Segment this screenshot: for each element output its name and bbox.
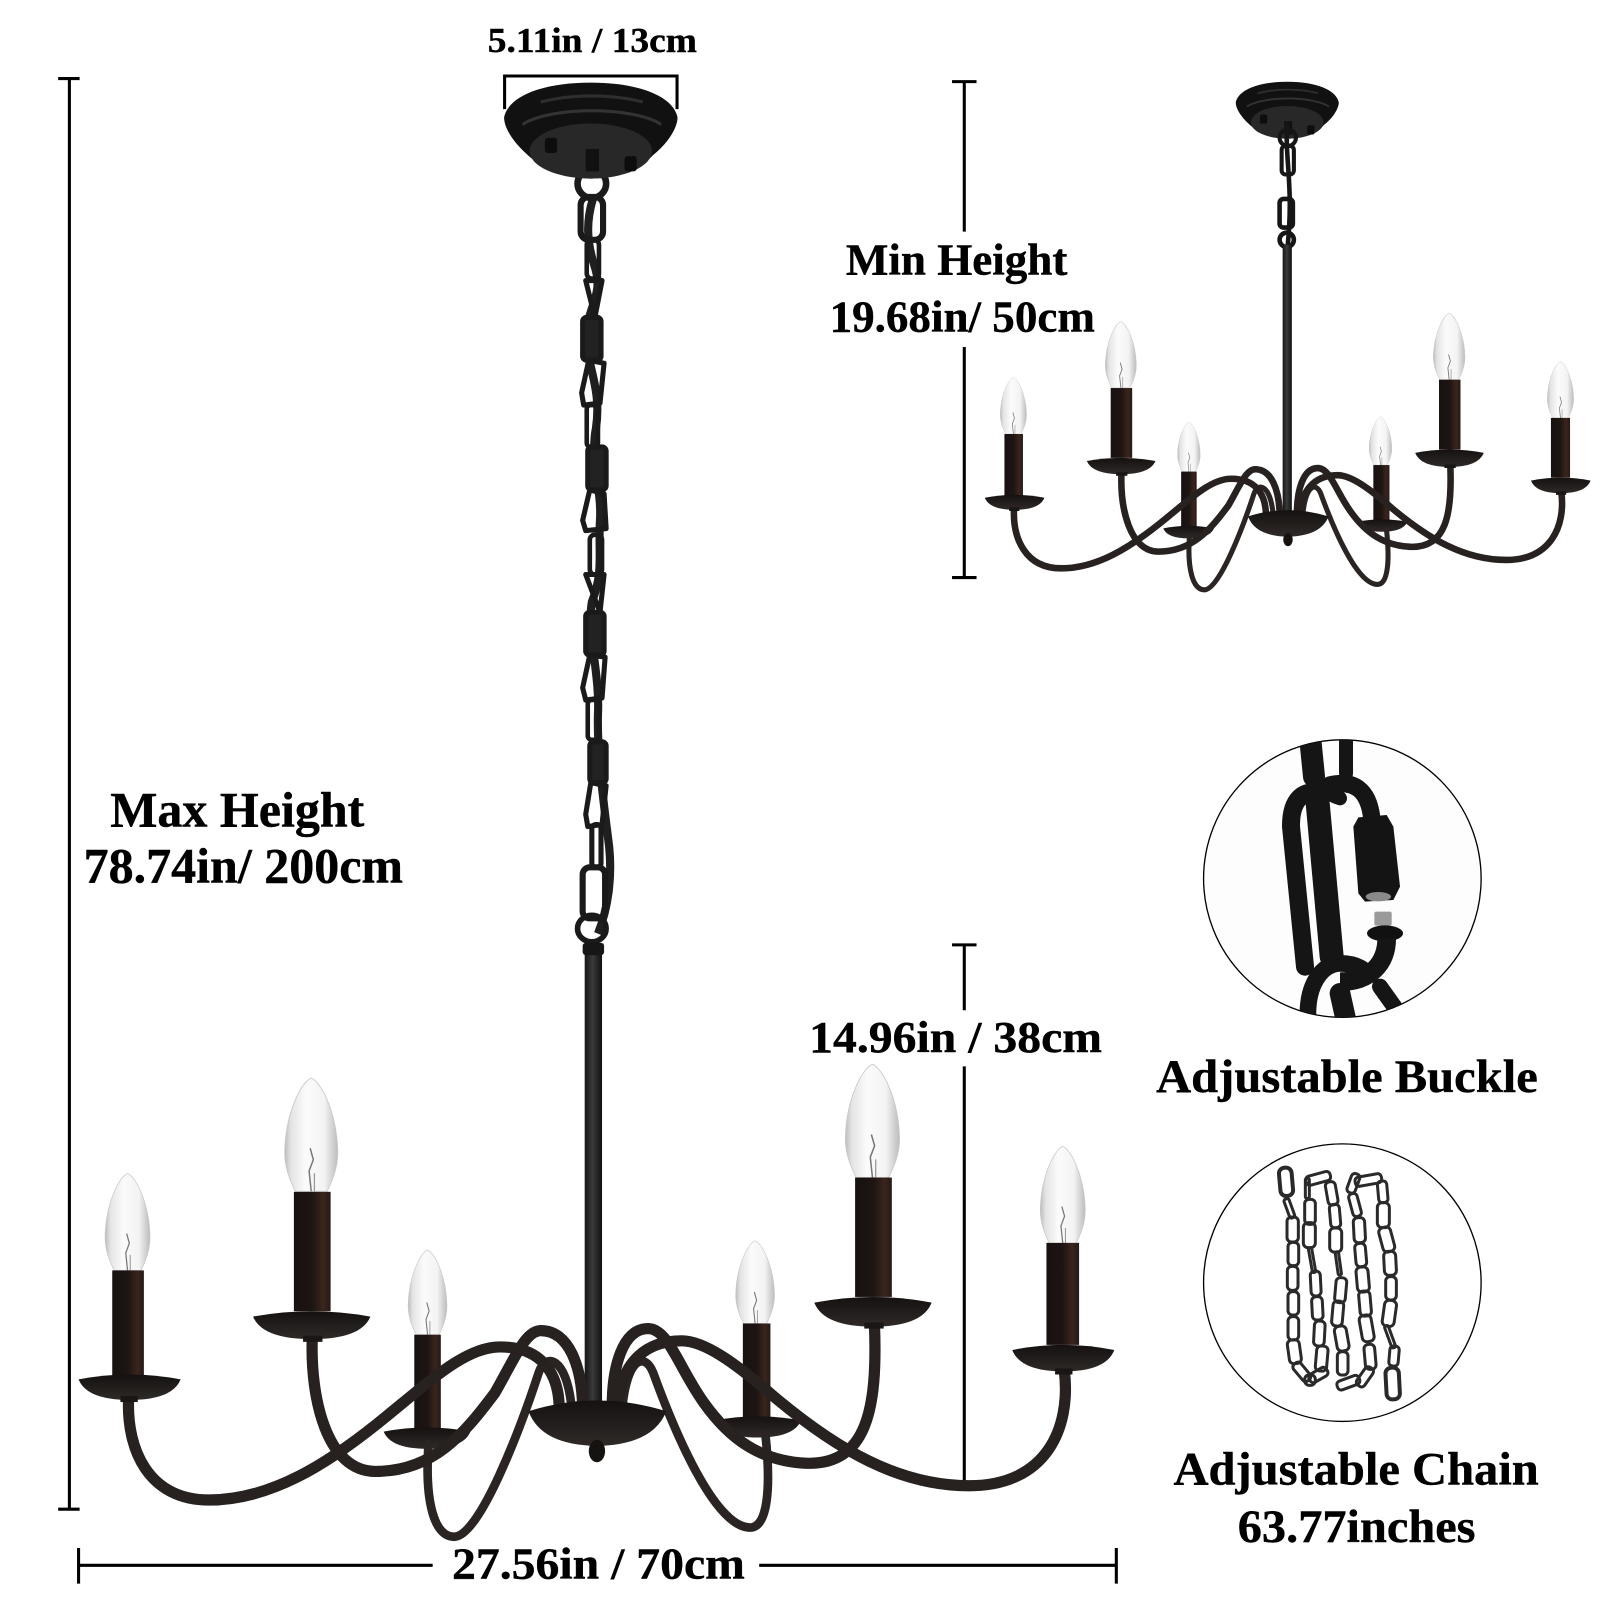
front arms	[128, 1326, 1065, 1500]
small chandelier rod	[1283, 245, 1292, 511]
back candles	[384, 1241, 801, 1449]
dimension: fixture height line	[952, 945, 977, 1488]
small chandelier canopy	[1236, 82, 1339, 139]
front candles	[79, 1064, 1114, 1402]
label: fixture height: 14.96in / 38cm	[809, 1012, 1102, 1062]
label: adjustable buckle: Adjustable Buckle	[1156, 1051, 1538, 1103]
large chandelier chain	[578, 149, 610, 942]
large chandelier body with arms, candles and bulbs	[79, 1064, 1114, 1537]
label: max height: 78.74in/ 200cm	[84, 838, 403, 894]
icon: coiled chain	[1278, 1167, 1400, 1400]
panel: buckle detail circle	[1204, 737, 1481, 1023]
large chandelier canopy	[504, 83, 678, 179]
label: max height: Max Height	[110, 782, 365, 838]
large chandelier rod	[583, 943, 604, 1403]
label: min height: 19.68in/ 50cm	[830, 292, 1095, 342]
small chandelier chain	[1280, 122, 1296, 247]
canopy stud	[586, 149, 600, 173]
dimension: fixture width line	[79, 1548, 1116, 1584]
label: adjustable chain: 63.77inches	[1238, 1501, 1476, 1553]
panel: chain detail circle	[1204, 1144, 1481, 1421]
central bowl and finial	[529, 1401, 666, 1462]
label: max height	[84, 782, 403, 894]
back arms	[428, 1361, 768, 1537]
dimension: min height line	[952, 82, 977, 578]
label: min height: Min Height	[846, 234, 1067, 284]
icon: buckle photo	[1291, 737, 1403, 1023]
label: adjustable chain: Adjustable Chain	[1173, 1444, 1539, 1496]
label: fixture width: 27.56in / 70cm	[452, 1539, 745, 1589]
dimension: canopy width bracket	[505, 76, 677, 109]
label: min height	[830, 234, 1095, 342]
dimension: max height line	[58, 79, 80, 1509]
label: adjustable chain	[1173, 1444, 1539, 1553]
small chandelier body	[985, 313, 1591, 590]
label: canopy width: 5.11in / 13cm	[488, 21, 697, 60]
